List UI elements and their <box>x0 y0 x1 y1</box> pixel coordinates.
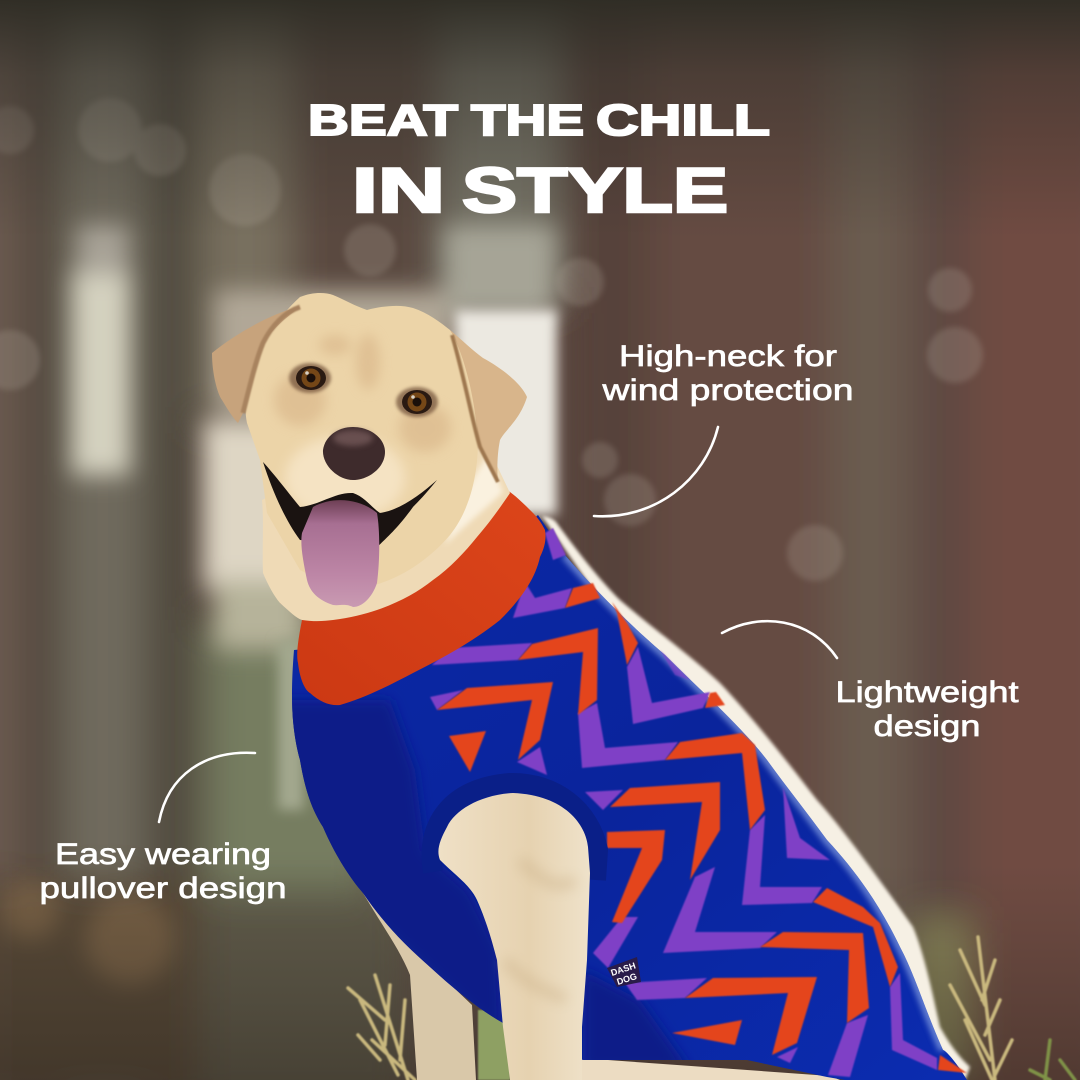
sweater pattern: orange chevrons <box>437 583 967 1073</box>
arrow: high-neck curve <box>594 427 718 516</box>
callout: easy wearing: Easy wearing <box>55 838 271 871</box>
neck fur <box>262 430 510 621</box>
eyes <box>289 363 438 417</box>
skull <box>246 293 478 590</box>
left ear <box>212 307 300 423</box>
arrow: easy wearing curve <box>159 753 255 822</box>
callout: lightweight: design <box>874 710 980 743</box>
title: STYLE <box>462 156 728 226</box>
bright gaps between trees <box>72 225 555 650</box>
title: BEAT <box>308 96 458 145</box>
white fur along back <box>542 516 970 1080</box>
title <box>308 96 770 226</box>
hind leg <box>363 893 476 1080</box>
title: IN <box>352 156 445 226</box>
mouth <box>263 462 437 547</box>
face shading <box>274 334 451 452</box>
armhole ribbing <box>432 783 598 880</box>
title: CHILL <box>596 96 770 145</box>
callout: high-neck: wind protection <box>601 374 854 407</box>
callout: lightweight <box>722 621 1019 743</box>
title: THE <box>471 96 584 145</box>
tongue <box>301 500 379 607</box>
belly <box>580 1058 840 1080</box>
dog <box>212 293 970 1080</box>
callout: easy wearing <box>40 753 286 905</box>
ear crease right <box>452 335 498 482</box>
callout: lightweight: Lightweight <box>836 676 1019 709</box>
sweater pattern: purple chevrons <box>430 528 937 1077</box>
sweater body <box>280 515 967 1080</box>
callout: high-neck <box>594 340 854 516</box>
grass foreground <box>348 937 1075 1080</box>
orange high-neck collar <box>280 490 545 705</box>
callout: high-neck: High-neck for <box>619 340 837 373</box>
arrow: lightweight curve <box>722 621 837 658</box>
right ear <box>450 330 527 482</box>
green gap behind legs <box>478 1010 510 1080</box>
size label on sweater <box>607 957 641 987</box>
dog front leg <box>438 793 590 1080</box>
size label on sweater: DOG <box>616 971 638 987</box>
callout: easy wearing: pullover design <box>40 872 286 905</box>
size label on sweater: DASH <box>610 961 637 978</box>
nose <box>323 427 385 480</box>
dog head <box>212 293 527 621</box>
muzzle <box>285 436 405 520</box>
